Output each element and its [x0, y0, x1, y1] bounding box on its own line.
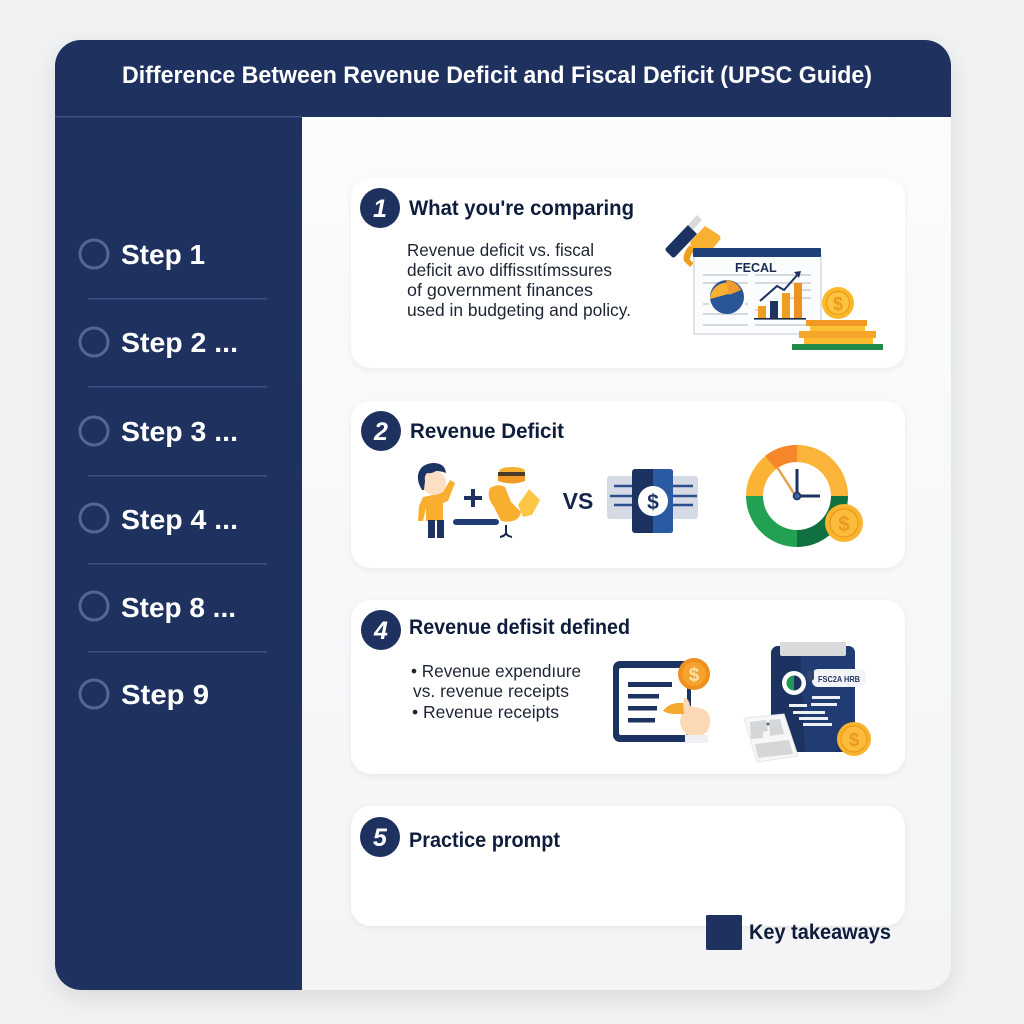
number badge 5: [360, 817, 400, 857]
bullet list: vs. revenue receipts: [413, 681, 569, 701]
number badge 4: [361, 610, 401, 650]
heading: Revenue Deficit: [410, 420, 564, 443]
panel: what you're comparing: [351, 178, 905, 368]
number badge 5: 5: [373, 824, 388, 852]
step 1: [80, 239, 205, 270]
heading: What you're comparing: [409, 197, 634, 220]
legend: key takeaways: [706, 915, 891, 950]
icon: tablet with hand and coin: $: [689, 665, 700, 686]
heading: Revenue defisit defined: [409, 616, 630, 639]
icon: coin stack: $: [833, 294, 843, 314]
number badge 2: [361, 411, 401, 451]
icon: clock gauge with coin: $: [838, 513, 850, 536]
text block: [407, 240, 631, 320]
text block: used in budgeting and policy.: [407, 300, 631, 320]
icon: person with balance and coins: [418, 463, 540, 538]
pie chart: [710, 280, 744, 314]
bar chart: [754, 271, 806, 320]
step 8: Step 8 ...: [121, 592, 236, 623]
icon: fiscal report with chart and coins: [666, 215, 883, 350]
icon: clock gauge with coin: [746, 445, 863, 547]
step 9: [80, 679, 209, 710]
heading: Practice prompt: [409, 829, 560, 852]
panel: practice prompt: [351, 806, 905, 926]
legend: key takeaways: Key takeaways: [749, 921, 891, 944]
number badge 4: 4: [373, 617, 388, 645]
icon: clipboard with map and coin: $: [849, 730, 860, 751]
icon: banknote with dollar: [607, 469, 698, 533]
icon: tablet with hand and coin: [613, 658, 710, 743]
vs label: VS: [563, 488, 593, 514]
number badge 1: 1: [373, 195, 387, 223]
report sheet: [694, 255, 821, 334]
number badge 1: [360, 188, 400, 228]
icon: marker: [666, 215, 720, 267]
step 3: Step 3 ...: [121, 416, 238, 447]
bullet list: • Revenue expendıure: [411, 661, 581, 681]
panel: sidebar: [55, 117, 302, 990]
panel: revenue deficit defined: [351, 600, 905, 774]
icon: banknote with dollar: $: [647, 491, 659, 514]
bullet list: • Revenue receipts: [412, 702, 559, 722]
header bar: [55, 40, 951, 117]
icon: clipboard with map and coin: FSC2A HRB: [818, 674, 860, 684]
bullet list: [411, 661, 581, 722]
icon: clipboard with map and coin: [744, 642, 871, 762]
step 2: Step 2 ...: [121, 327, 238, 358]
title: Difference Between Revenue Deficit and Fiscal Deficit (UPSC Guide): [122, 62, 872, 89]
step 9: Step 9: [121, 679, 209, 710]
number badge 2: 2: [373, 418, 388, 446]
icon: coin stack: [792, 287, 883, 350]
text block: Revenue deficit vs. fiscal: [407, 240, 594, 260]
step 4: Step 4 ...: [121, 504, 238, 535]
icon: fiscal report with chart and coins: FECAL: [735, 261, 777, 275]
sidebar step list: [80, 239, 267, 710]
text block: deficit avo difﬁssιtímssures: [407, 260, 612, 280]
step 1: Step 1: [121, 239, 205, 270]
panel: revenue deficit: [351, 401, 905, 568]
text block: of government finances: [407, 280, 593, 300]
